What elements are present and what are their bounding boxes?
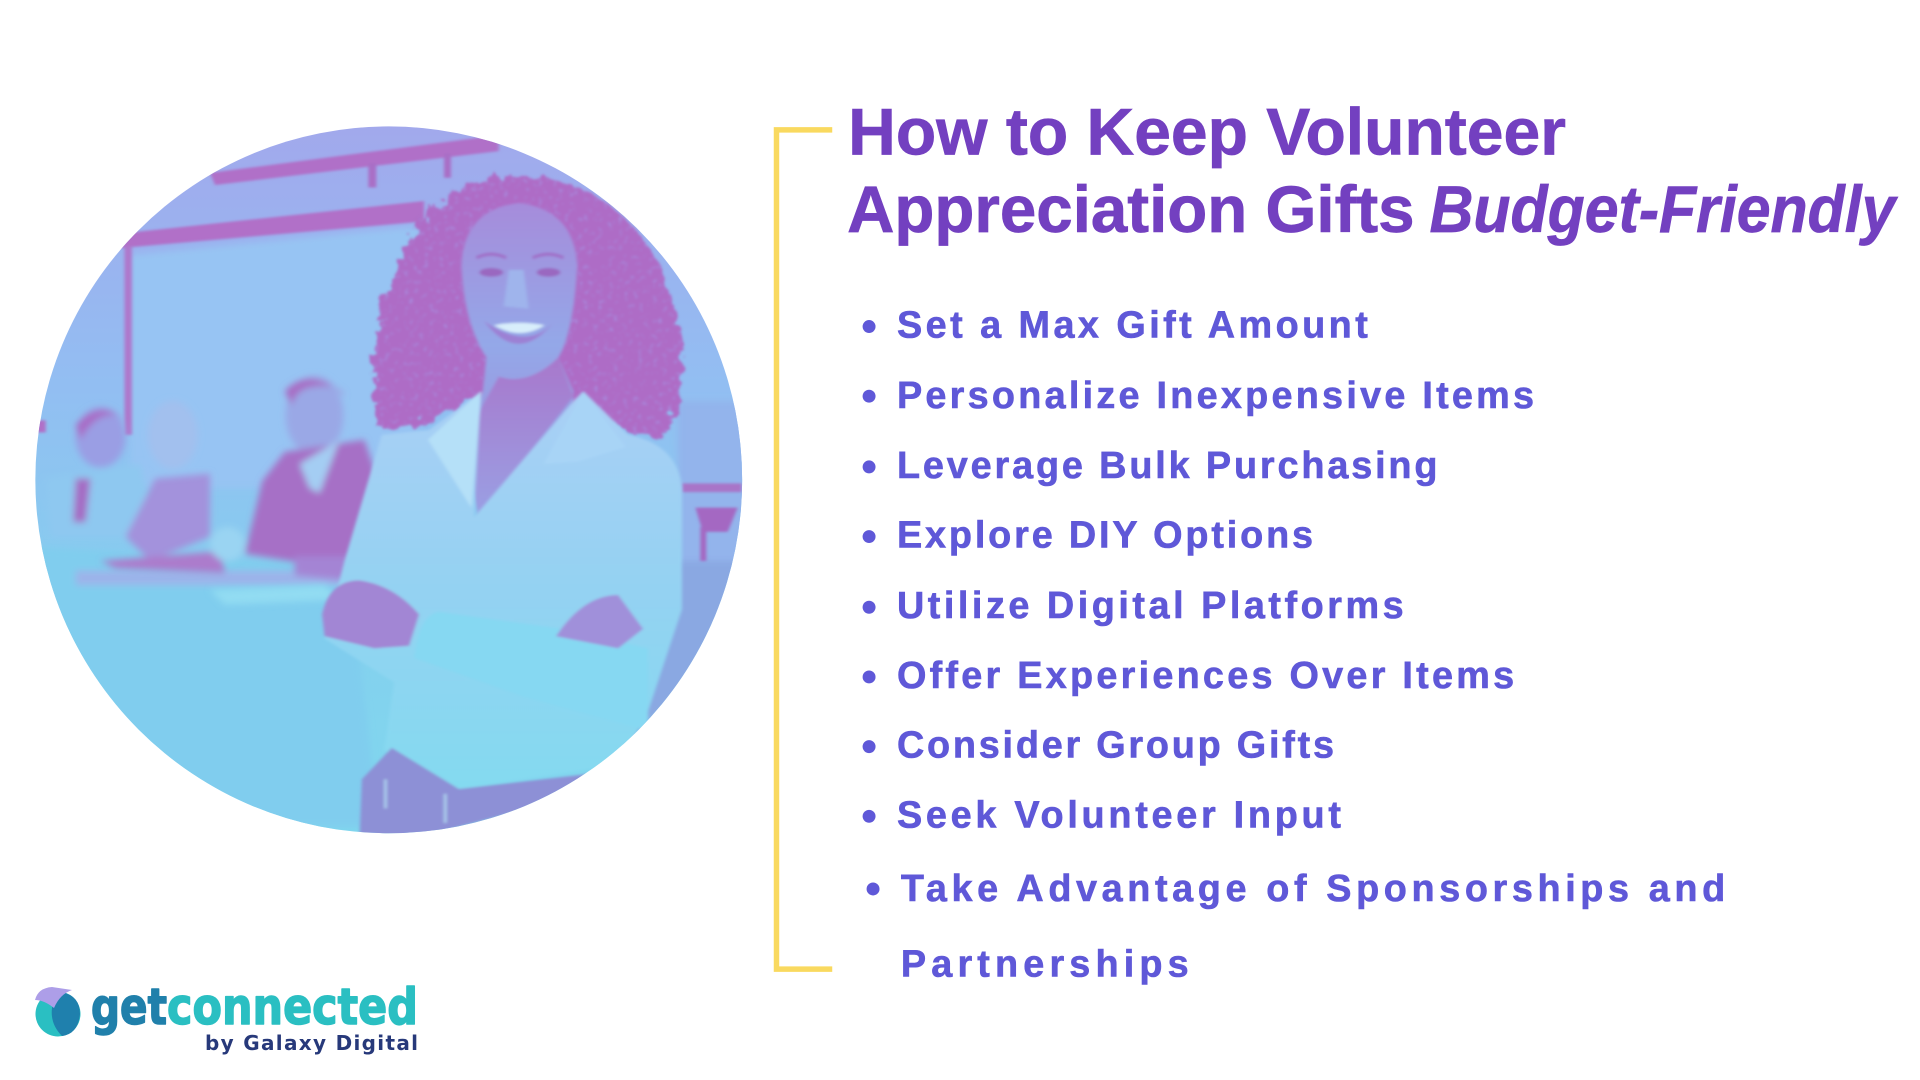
logo wordmark: get [91, 978, 167, 1036]
logo icon [35, 987, 80, 1036]
bullet list of budget tips [863, 304, 1725, 986]
title: Appreciation Gifts [847, 173, 1415, 246]
title [847, 95, 1899, 246]
item 1: Set a Max Gift Amount [897, 304, 1368, 346]
title: How to Keep Volunteer [848, 95, 1566, 168]
logo tagline: by Galaxy Digital [205, 1031, 418, 1055]
woman hair [373, 176, 684, 440]
woman face and neck [461, 203, 577, 517]
item 9: Partnerships [901, 944, 1189, 986]
item 6: Offer Experiences Over Items [897, 655, 1514, 697]
item 7: Consider Group Gifts [897, 725, 1334, 767]
logo: getconnected by Galaxy Digital [35, 978, 418, 1055]
woman shirt and arms [322, 391, 682, 842]
item 2: Personalize Inexpensive Items [897, 375, 1534, 417]
item 8: Seek Volunteer Input [897, 794, 1341, 836]
item 9: Take Advantage of Sponsorships and [901, 868, 1725, 910]
item 5: Utilize Digital Platforms [897, 585, 1404, 627]
item 9 [867, 868, 1725, 986]
title: Budget-Friendly [1430, 173, 1899, 246]
yellow bracket [776, 130, 832, 969]
item 4: Explore DIY Options [897, 515, 1313, 557]
photo: smiling woman with colleagues in duotone circle [30, 119, 748, 842]
logo wordmark 2: connected [167, 978, 418, 1036]
item 3: Leverage Bulk Purchasing [897, 445, 1438, 487]
background colleagues [46, 376, 379, 605]
